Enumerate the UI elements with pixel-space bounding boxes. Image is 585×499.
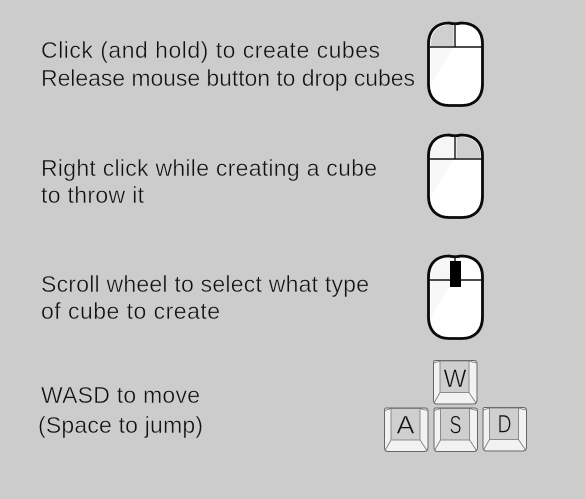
text block: right click to throw: Right click while creating a cube [41,155,377,181]
text block: scroll wheel: Scroll wheel to select what type [41,271,369,297]
icon: W key [434,360,477,404]
text block: right click to throw: to throw it [41,182,145,208]
text block: movement: (Space to jump) [38,412,203,438]
text block: click to create: Release mouse button to drop cubes [41,65,415,91]
text block: movement: WASD to move [41,382,200,408]
text block: click to create: Click (and hold) to create cubes [41,37,380,63]
text block: scroll wheel: of cube to create [41,298,220,324]
icon: S key: S [450,412,462,440]
icon: S key [434,408,478,452]
icon: mouse left button highlighted [428,23,482,106]
icon: W key: W [444,365,467,393]
text block: click to create [41,37,415,91]
text block: right click to throw [41,155,377,208]
icon: A key [384,408,428,452]
icon: D key: D [498,410,512,438]
text block: movement [38,382,203,438]
icon: A key: A [396,412,415,440]
icon: D key [483,408,526,451]
icon: mouse scroll wheel highlighted [428,256,482,338]
icon: mouse right button highlighted [428,135,482,218]
text block: scroll wheel [41,271,369,324]
